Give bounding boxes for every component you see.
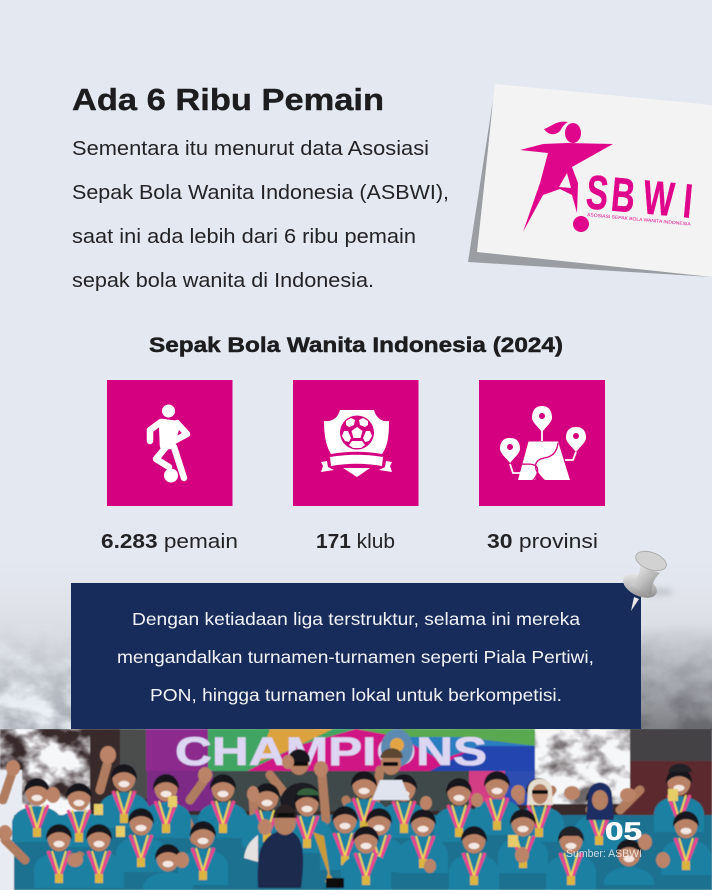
intro text block: Sepak Bola Wanita Indonesia (ASBWI), bbox=[72, 181, 449, 204]
banner bbox=[246, 729, 526, 772]
medals bbox=[94, 789, 678, 847]
callout box bbox=[71, 583, 641, 729]
stat tile: provinces bbox=[479, 380, 605, 506]
icon: push pin bbox=[619, 548, 673, 611]
team photo: CHAMPIONS bbox=[175, 730, 487, 774]
team photo bbox=[0, 729, 712, 890]
stat label: 6.283 pemain: 6.283 pemain bbox=[101, 530, 238, 553]
callout text: mengandalkan turnamen-turnamen seperti Piala Pertiwi, bbox=[117, 647, 594, 667]
icon: ASBWI player bbox=[520, 122, 613, 232]
lower crowd base bbox=[14, 815, 712, 890]
raised arms bbox=[3, 765, 640, 880]
logo wordmark: SBWI bbox=[584, 165, 695, 228]
logo tagline: ASOSIASI SEPAK BOLA WANITA INDONESIA bbox=[587, 212, 691, 227]
intro text block: saat ini ada lebih dari 6 ribu pemain bbox=[72, 225, 416, 248]
stat tile: players bbox=[107, 380, 232, 506]
page number: 05 bbox=[605, 818, 642, 846]
source note: Sumber: ASBWI bbox=[566, 848, 642, 860]
section heading: Sepak Bola Wanita Indonesia (2024) bbox=[149, 333, 563, 357]
icon: club shield bbox=[321, 410, 392, 477]
woman in navy vest bbox=[258, 830, 303, 888]
stat label: 171 klub: 171 klub bbox=[316, 530, 395, 553]
trophy bbox=[313, 832, 336, 882]
colored head coverings bbox=[586, 782, 614, 820]
icon: map with pins bbox=[500, 406, 586, 481]
intro text block: Sementara itu menurut data Asosiasi bbox=[72, 137, 429, 160]
dark-clad officials bbox=[280, 783, 318, 810]
intro text block bbox=[72, 137, 449, 292]
icon: footballer bbox=[150, 404, 187, 482]
team members, back row bbox=[12, 778, 62, 842]
intro text block: sepak bola wanita di Indonesia. bbox=[72, 269, 374, 292]
callout text: Dengan ketiadaan liga terstruktur, selama ini mereka bbox=[132, 609, 580, 629]
logo card: ASBWI bbox=[468, 84, 712, 277]
title: Ada 6 Ribu Pemain bbox=[72, 82, 384, 117]
callout text bbox=[117, 609, 594, 705]
smoke background bbox=[0, 560, 712, 730]
callout text: PON, hingga turnamen lokal untuk berkompetisi. bbox=[150, 685, 562, 705]
team members, front row bbox=[292, 795, 332, 853]
stat label: 30 provinsi: 30 provinsi bbox=[487, 530, 598, 553]
stat tile: clubs bbox=[293, 380, 418, 506]
hands bbox=[0, 746, 670, 873]
